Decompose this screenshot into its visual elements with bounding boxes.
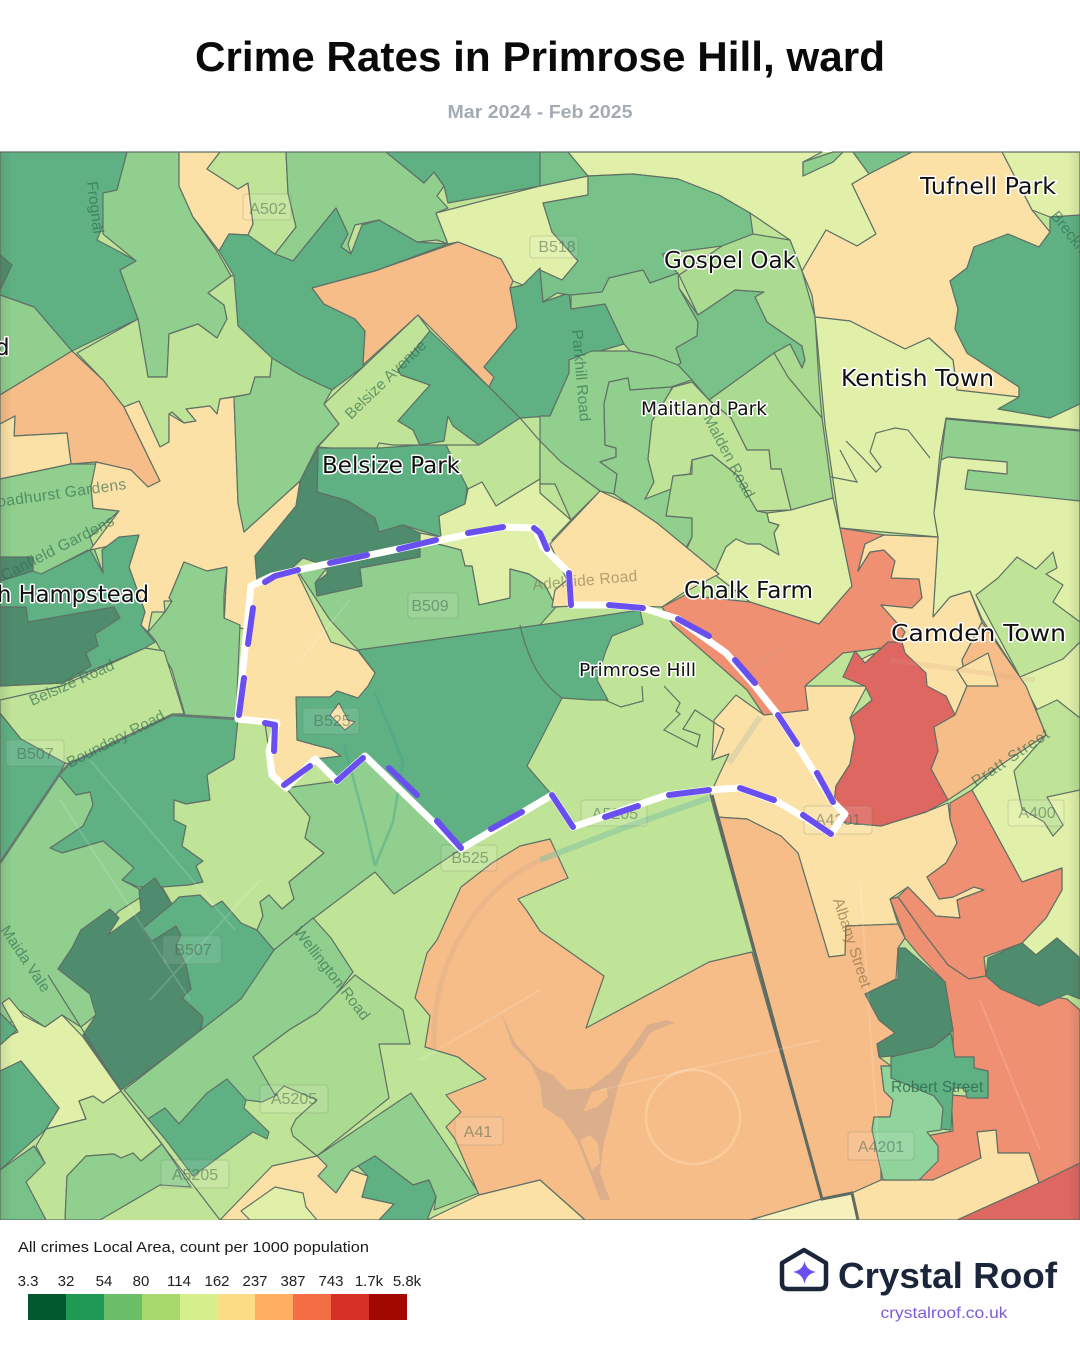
road shields: A502 — [249, 201, 287, 218]
road shields: B518 — [538, 239, 576, 256]
road labels: Parkhill Road — [568, 329, 593, 422]
legend: 3.3 — [18, 1273, 38, 1290]
place labels: Kentish Town — [841, 366, 994, 392]
place labels: h Hampstead — [0, 582, 149, 608]
road labels: Belsize Avenue — [342, 337, 430, 423]
road labels — [0, 180, 1080, 1096]
road shields: B507 — [16, 746, 54, 763]
road labels: Pratt Street — [969, 726, 1053, 790]
place labels: Maitland Park — [641, 398, 767, 420]
legend: 1.7k — [355, 1273, 384, 1290]
road labels: Wellington Road — [290, 924, 373, 1024]
road labels: Boundary Road — [64, 708, 168, 772]
place labels — [0, 174, 1066, 681]
legend: 80 — [133, 1273, 149, 1290]
place labels: Gospel Oak — [664, 248, 797, 274]
road labels: oadhurst Gardens — [0, 476, 128, 511]
legend: 237 — [242, 1273, 268, 1290]
road labels: Albany Street — [829, 896, 874, 990]
road shields: A4201 — [858, 1139, 904, 1156]
footer white band — [0, 1220, 1080, 1350]
title: Crime Rates in Primrose Hill, ward — [195, 33, 885, 80]
choropleth map — [0, 152, 1080, 1220]
road labels: Belsize Road — [27, 657, 117, 710]
road shields: B525 — [451, 850, 489, 867]
road labels: Malden Road — [699, 412, 758, 501]
icon: house logo — [782, 1250, 826, 1289]
road labels: Frognal — [83, 180, 106, 235]
road shields: A400 — [1018, 805, 1056, 822]
legend: 743 — [318, 1273, 344, 1290]
road shields: A41 — [464, 1124, 492, 1141]
road shields: B525 — [313, 713, 351, 730]
brand name: Crystal Roof — [838, 1255, 1058, 1296]
road shields: A5205 — [172, 1167, 218, 1184]
legend: 114 — [167, 1273, 191, 1290]
place labels: Primrose Hill — [579, 660, 696, 681]
legend — [18, 1273, 422, 1320]
legend: 162 — [204, 1273, 230, 1290]
date range subtitle: Mar 2024 - Feb 2025 — [448, 102, 632, 122]
road shields: A4201 — [815, 812, 861, 829]
place labels: Tufnell Park — [919, 174, 1057, 200]
place labels: Camden Town — [891, 621, 1066, 647]
legend: 32 — [58, 1273, 74, 1290]
road shields: A5205 — [592, 806, 638, 823]
place labels: Chalk Farm — [684, 578, 813, 604]
legend: 387 — [280, 1273, 306, 1290]
road shields: A5205 — [271, 1091, 317, 1108]
road shields: B509 — [411, 598, 449, 615]
ward boundary — [238, 527, 845, 849]
road labels: Canfield Gardens — [0, 513, 117, 585]
legend: 5.8k — [393, 1273, 422, 1290]
legend title: All crimes Local Area, count per 1000 population — [18, 1239, 369, 1256]
park, railway and road details — [0, 152, 1080, 1220]
road labels: Robert Street — [891, 1079, 984, 1096]
place labels: Belsize Park — [322, 453, 461, 479]
legend: 54 — [96, 1273, 112, 1290]
road shields: B507 — [174, 942, 212, 959]
road labels: Adelaide Road — [532, 568, 638, 594]
road shields — [6, 194, 1064, 1188]
website: crystalroof.co.uk — [880, 1305, 1009, 1322]
